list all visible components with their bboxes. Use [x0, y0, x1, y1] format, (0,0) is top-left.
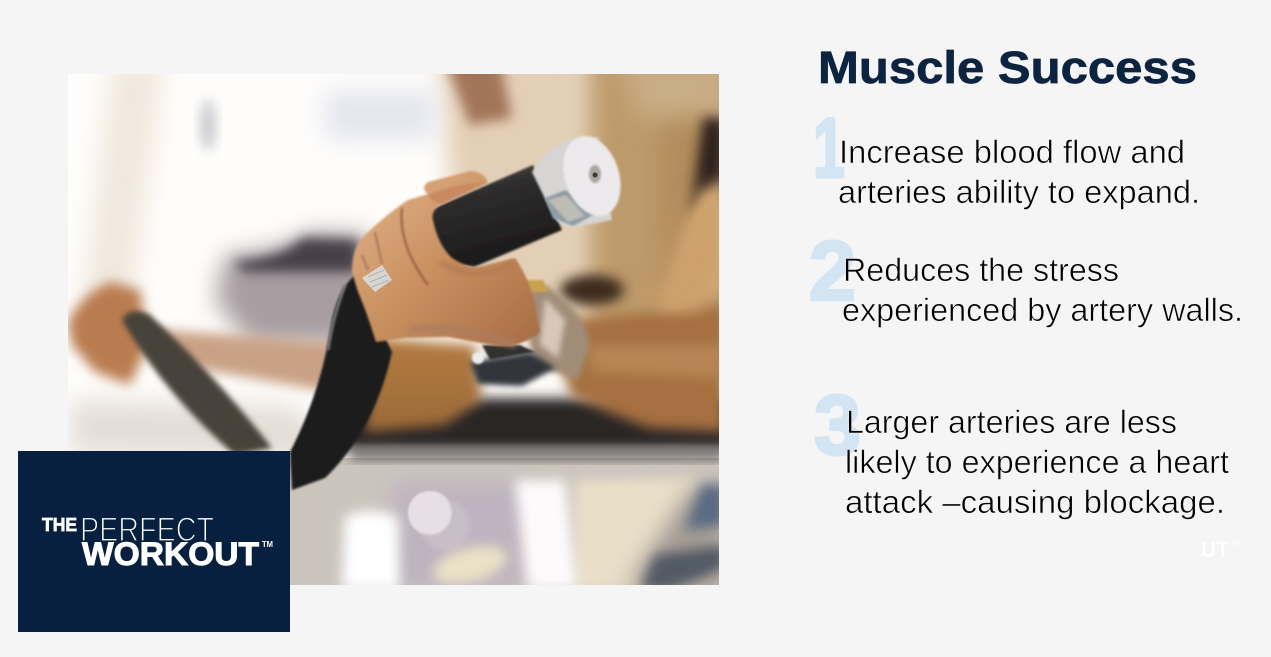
item 3 text	[845, 404, 1229, 520]
number 3: 3	[814, 378, 861, 472]
item 2 text: Reduces the stress	[843, 252, 1119, 288]
item 2 text: experienced by artery walls.	[842, 292, 1243, 328]
main handle stalk	[290, 275, 392, 490]
UT watermark logo: TM	[1230, 541, 1239, 547]
logo wordmark	[42, 511, 273, 572]
logo wordmark: THE	[42, 515, 77, 535]
item 1 text: arteries ability to expand.	[838, 174, 1200, 210]
UT watermark logo: UT	[1201, 537, 1230, 562]
item 3	[814, 378, 1229, 520]
lower blurred floor area	[280, 398, 730, 593]
title: Muscle Success	[818, 42, 1197, 93]
metal cap of handle	[530, 135, 622, 228]
photo background	[68, 74, 719, 402]
logo wordmark: PERFECT	[80, 511, 214, 549]
item 3 text: attack –causing blockage.	[845, 484, 1225, 520]
logo wordmark: WORKOUT	[82, 536, 259, 572]
number 1: 1	[813, 101, 845, 195]
item 2	[809, 224, 1243, 328]
blurred dark machine panel	[70, 232, 370, 460]
photo: hand gripping exercise machine handle	[68, 50, 740, 593]
item 3 text: Larger arteries are less	[846, 404, 1177, 440]
watch and bracelet	[470, 280, 590, 386]
logo wordmark: TM	[262, 540, 273, 549]
left blurred handle	[122, 311, 272, 455]
forearms	[365, 300, 725, 432]
gripping hand	[352, 171, 540, 346]
item 1 text: Increase blood flow and	[839, 134, 1185, 170]
number 2: 2	[809, 224, 856, 318]
diamond ring	[362, 265, 392, 292]
handle grip	[420, 165, 562, 267]
item 3 text: likely to experience a heart	[845, 444, 1229, 480]
item 2 text	[842, 252, 1243, 328]
logo panel	[18, 451, 290, 632]
item 1	[813, 101, 1200, 210]
left hand and forearm	[68, 282, 365, 398]
item 1 text	[838, 134, 1200, 210]
